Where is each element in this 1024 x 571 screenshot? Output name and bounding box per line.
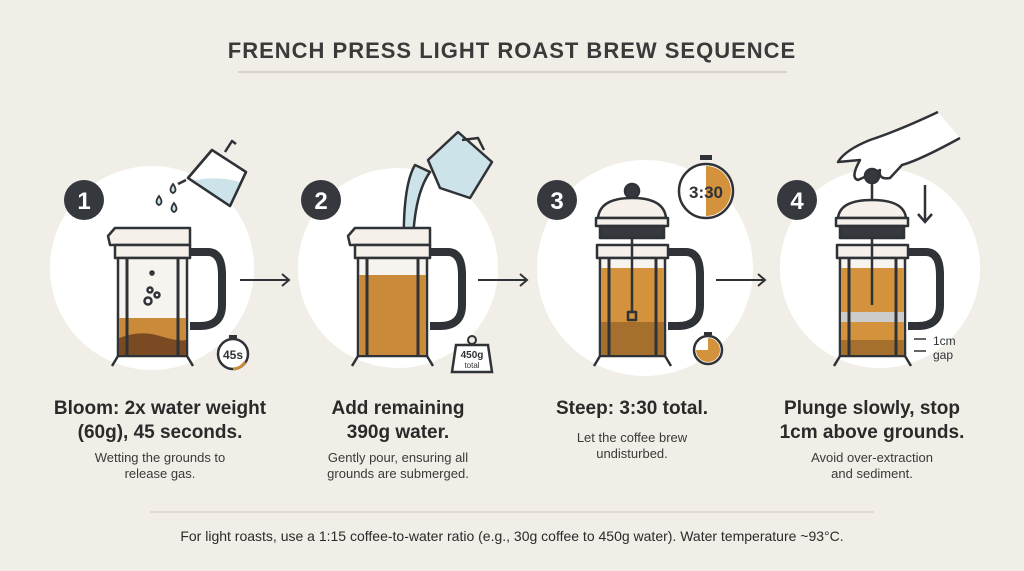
- text: step 1: [54, 398, 267, 481]
- badge 3: [537, 180, 577, 220]
- icon: 450g weight: 450g: [461, 350, 483, 361]
- icon: kettle pouring stream: [404, 132, 492, 275]
- text: step 2: Add remaining: [331, 398, 465, 419]
- panel: step 1: [50, 141, 254, 370]
- french press 3: [594, 184, 700, 366]
- footer note: For light roasts, use a 1:15 coffee-to-water ratio (e.g., 30g coffee to 450g water). Water temperature ~93°C.: [180, 528, 844, 544]
- text: step 1: Bloom: 2x water weight: [54, 398, 267, 419]
- icon: kettle pouring: [178, 141, 246, 206]
- text: step 4: Avoid over-extraction: [811, 450, 933, 465]
- label: 1cm gap: gap: [933, 348, 953, 362]
- text: step 3: Let the coffee brew: [577, 430, 688, 445]
- french press 4: [834, 169, 940, 366]
- icon: 450g weight: total: [464, 361, 480, 370]
- badge 2: [301, 180, 341, 220]
- text: step 1: Wetting the grounds to: [95, 450, 225, 465]
- arrow 1: [240, 274, 289, 286]
- badge 3: 3: [550, 188, 564, 215]
- badge 4: [777, 180, 817, 220]
- french press 1: [108, 228, 222, 366]
- icon: small timer: [694, 332, 722, 364]
- icon: 45s timer: 45s: [223, 348, 243, 362]
- arrow 2: [478, 274, 527, 286]
- title: FRENCH PRESS LIGHT ROAST BREW SEQUENCE: [228, 38, 796, 63]
- icon: 3:30 stopwatch: 3:30: [689, 183, 723, 202]
- panel: step 3: [537, 155, 753, 376]
- icon: water drops: [156, 184, 176, 212]
- icon: 3:30 stopwatch: [679, 155, 733, 218]
- text: step 3: [556, 398, 708, 461]
- text: step 2: Gently pour, ensuring all: [328, 450, 468, 465]
- text: step 2: grounds are submerged.: [327, 466, 469, 481]
- text: step 2: 390g water.: [347, 422, 449, 443]
- panel: step 4: [777, 112, 980, 368]
- icon: down arrow: [918, 185, 932, 222]
- text: step 3: Steep: 3:30 total.: [556, 398, 708, 419]
- text: step 1: (60g), 45 seconds.: [78, 422, 242, 443]
- arrow 3: [716, 274, 765, 286]
- text: step 4: and sediment.: [831, 466, 913, 481]
- icon: hand: [838, 112, 960, 180]
- text: step 3: undisturbed.: [596, 446, 668, 461]
- icon: 450g weight: [452, 336, 492, 372]
- text: step 4: 1cm above grounds.: [780, 422, 964, 443]
- text: step 1: release gas.: [125, 466, 195, 481]
- text: step 2: [327, 398, 469, 481]
- text: step 4: [780, 398, 964, 481]
- badge 1: [64, 180, 104, 220]
- label: 1cm gap: [914, 334, 956, 362]
- badge 4: 4: [790, 188, 804, 215]
- label: 1cm gap: 1cm: [933, 334, 956, 348]
- icon: 45s timer: [218, 335, 248, 369]
- french press 2: [348, 228, 462, 366]
- text: step 4: Plunge slowly, stop: [784, 398, 960, 419]
- panel: step 2: [298, 132, 498, 372]
- badge 2: 2: [314, 188, 328, 215]
- badge 1: 1: [77, 188, 91, 215]
